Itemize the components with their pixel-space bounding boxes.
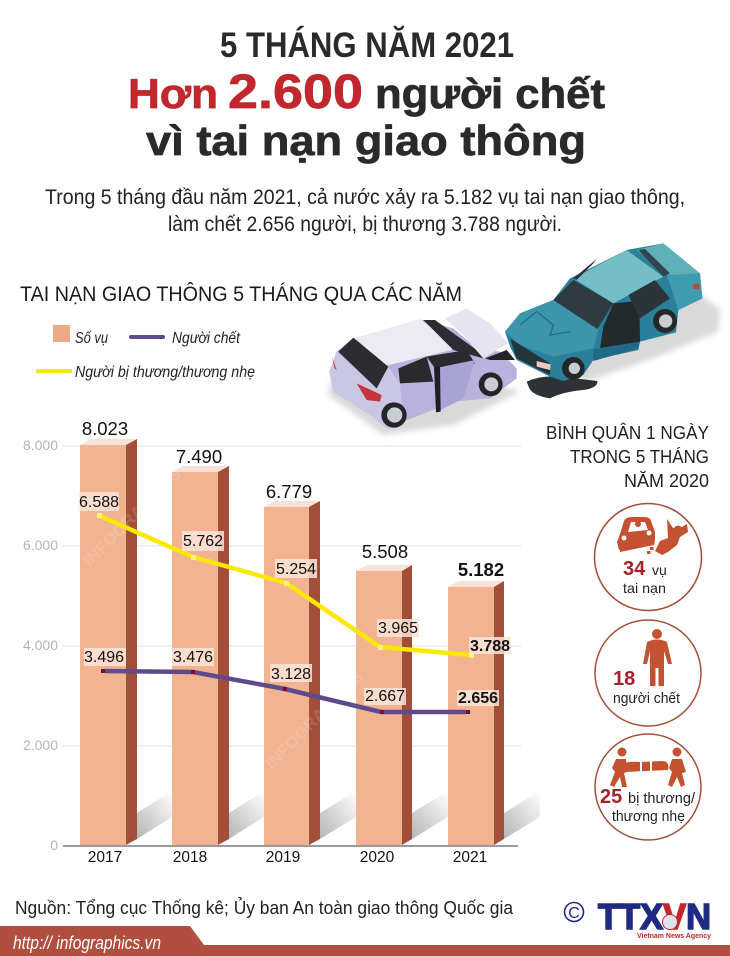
year labels: 2019 (266, 849, 300, 866)
heading line 1: 2.600 (228, 66, 363, 119)
icon: stretcher bearers (610, 748, 686, 787)
year labels: 2021 (453, 849, 487, 866)
stat circle: 25 bị thương: bị thương/ (628, 790, 696, 807)
line value labels: 2.667 (365, 688, 405, 705)
line value labels: 3.496 (84, 649, 124, 666)
year labels: 2020 (360, 849, 395, 866)
icon: person (643, 629, 672, 686)
line value labels: 3.965 (378, 620, 418, 637)
year labels (88, 849, 487, 866)
watermarks: INFOGRAPHICS (261, 667, 367, 773)
footer band (0, 926, 730, 956)
y axis labels: 6.000 (23, 537, 58, 553)
intro text: làm chết 2.656 người, bị thương 3.788 người. (168, 213, 562, 236)
year labels: 2018 (173, 849, 207, 866)
illustration: two crashed cars (328, 243, 720, 435)
legend: số vụ: Số vụ (75, 330, 108, 347)
side heading: TRONG 5 THÁNG (570, 446, 709, 467)
heading line 1: người chết (375, 70, 605, 117)
y axis labels: 4.000 (23, 637, 58, 653)
intro text (45, 186, 685, 236)
stat circle: 34 vụ tai nạn: 34 (623, 558, 646, 580)
white car (329, 320, 517, 428)
side heading: NĂM 2020 (624, 470, 709, 491)
legend: người chết: Người chết (172, 330, 241, 347)
logo: TTXVN: Vietnam News Agency (637, 931, 712, 940)
year labels: 2017 (88, 849, 122, 866)
logo: TTXVN: C (568, 905, 580, 922)
stat circle: 18 người chết: 18 (613, 668, 635, 690)
line: người chết (101, 669, 470, 714)
line value labels: 3.788 (470, 638, 510, 655)
icon: car hitting motorbike (617, 517, 688, 555)
heading line 1 (128, 66, 605, 119)
line value labels: 2.656 (458, 690, 498, 707)
stat circle: 34 vụ tai nạn (594, 504, 702, 610)
bar 2017 (80, 439, 137, 845)
stat circle: 25 bị thương: 25 (600, 786, 622, 808)
bar shadows (137, 791, 540, 839)
source note: Nguồn: Tổng cục Thống kê; Ủy ban An toàn giao thông Quốc gia (15, 897, 514, 918)
y axis labels: 8.000 (23, 437, 58, 453)
y axis labels: 2.000 (23, 737, 58, 753)
line value labels: 5.762 (183, 533, 223, 550)
grid lines (62, 446, 521, 746)
heading line 2: vì tai nạn giao thông (146, 117, 586, 164)
line: người bị thương (97, 513, 474, 658)
stat circle: 34 vụ tai nạn: tai nạn (623, 580, 666, 596)
y axis labels (23, 437, 58, 853)
watermarks (79, 464, 367, 773)
bar 2019 (264, 501, 320, 845)
line value labels: 6.588 (79, 494, 119, 511)
watermarks: INFOGRAPHICS (79, 464, 185, 570)
baseline (63, 845, 518, 847)
url: http:// infographics.vn (13, 933, 161, 953)
heading line 1: Hơn (128, 70, 218, 117)
bar 2018 (172, 466, 229, 845)
side heading: BÌNH QUÂN 1 NGÀY (546, 422, 709, 443)
stat circle: 25 bị thương (595, 734, 701, 840)
bar 2020 (356, 565, 412, 845)
title: 5 tháng năm 2021: 5 THÁNG NĂM 2021 (220, 25, 514, 65)
bar 2021 (448, 581, 504, 845)
stat circle: 18 người chết: người chết (613, 690, 681, 707)
chart heading: TAI NẠN GIAO THÔNG 5 THÁNG QUA CÁC NĂM (20, 283, 462, 306)
line value labels (79, 492, 511, 707)
stat circle: 34 vụ tai nạn: vụ (652, 562, 667, 578)
logo: TTXVN: TTXVN (598, 896, 711, 937)
line value labels: 5.254 (276, 561, 316, 578)
line value labels: 3.128 (271, 666, 311, 683)
stat circle: 25 bị thương: thương nhẹ (612, 808, 685, 825)
legend: người chết (129, 330, 241, 347)
bar value labels: 5.182 (458, 559, 504, 580)
blue car (505, 243, 702, 381)
stat circle: 18 người chết (595, 620, 701, 726)
bar value labels: 8.023 (82, 418, 128, 439)
bar chart (23, 418, 540, 866)
legend (36, 325, 255, 381)
shadows (328, 292, 720, 435)
side heading (546, 422, 709, 491)
y axis labels: 0 (50, 837, 58, 853)
bar value labels: 5.508 (362, 541, 408, 562)
bar value labels (82, 418, 504, 580)
intro text: Trong 5 tháng đầu năm 2021, cả nước xảy ra 5.182 vụ tai nạn giao thông, (45, 186, 685, 209)
bar value labels: 7.490 (176, 446, 222, 467)
line value labels: 3.476 (173, 649, 213, 666)
bar value labels: 6.779 (266, 481, 312, 502)
legend: số vụ (53, 325, 108, 347)
legend: người bị thương: Người bị thương/thương nhẹ (75, 364, 255, 381)
